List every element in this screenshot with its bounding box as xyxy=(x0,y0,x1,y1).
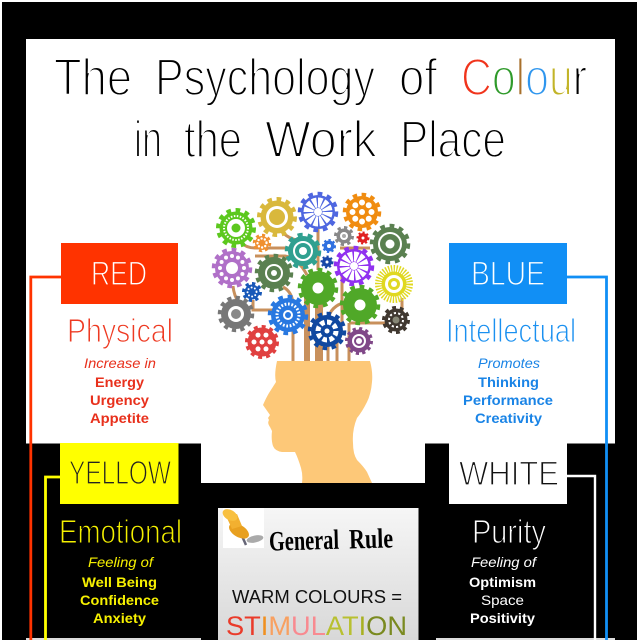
yellow label box xyxy=(60,443,178,504)
gear: olive xyxy=(256,256,292,290)
white list: Space xyxy=(481,592,524,608)
gear: dark green right xyxy=(372,226,408,262)
red label box xyxy=(61,243,178,304)
blue heading: Intellectual xyxy=(446,312,576,349)
red label box: RED xyxy=(91,255,147,293)
white list: Feeling of xyxy=(471,554,538,570)
title: in xyxy=(134,111,162,169)
gear: dark brown xyxy=(384,308,408,332)
white list xyxy=(469,554,538,626)
red list: Increase in xyxy=(84,355,156,371)
blue label box xyxy=(449,243,567,304)
gear: blue spoked xyxy=(300,194,336,230)
panel: red xyxy=(61,243,178,426)
title xyxy=(54,49,587,169)
blue list: Thinking xyxy=(478,374,539,390)
gear: small grey xyxy=(336,228,352,244)
gear: blue ring xyxy=(270,296,306,334)
gear: small orange xyxy=(254,235,270,251)
icon: head silhouette xyxy=(263,361,372,483)
title: Place xyxy=(400,111,506,169)
gear: red xyxy=(246,326,278,358)
connector: yellow line xyxy=(46,477,60,640)
yellow list: Well Being xyxy=(82,574,157,590)
gear: small dark blue xyxy=(322,256,332,268)
white label box: WHITE xyxy=(459,455,559,493)
gear: small blue dotted xyxy=(244,284,260,300)
panel: white xyxy=(449,443,567,626)
white list: Optimism xyxy=(469,574,536,590)
gear: green centre xyxy=(300,270,336,306)
title: Work xyxy=(265,111,378,169)
gear: yellow sun xyxy=(378,268,410,300)
gear: teal xyxy=(286,234,320,268)
blue list: Performance xyxy=(463,392,553,408)
title: the xyxy=(184,111,242,169)
gear: green right xyxy=(342,286,378,324)
gear: plum xyxy=(346,328,372,354)
icon: gear cluster xyxy=(214,194,410,358)
warm colours text: WARM COLOURS = xyxy=(232,587,402,607)
gear: navy xyxy=(310,314,344,348)
general rule heading: General xyxy=(269,525,340,558)
gear: small blue xyxy=(323,240,335,252)
blue label box: BLUE xyxy=(471,255,545,293)
gear: violet spoked xyxy=(336,248,372,284)
panel: white main background xyxy=(26,39,615,483)
connector: white line xyxy=(567,476,595,640)
title: Psychology xyxy=(155,49,375,107)
panel: general rule xyxy=(218,507,418,640)
icon: push pin xyxy=(221,507,264,548)
white heading: Purity xyxy=(472,513,546,550)
red list xyxy=(84,355,156,426)
gear: orange xyxy=(344,194,380,230)
blue list xyxy=(463,355,553,426)
title: Colour xyxy=(461,49,587,107)
panel: blue xyxy=(446,243,576,426)
tree branches xyxy=(232,224,402,361)
red list: Appetite xyxy=(90,410,149,426)
yellow heading: Emotional xyxy=(59,513,182,550)
general rule heading: Rule xyxy=(349,523,393,555)
red list: Urgency xyxy=(90,392,149,408)
gear: gold xyxy=(259,199,295,235)
yellow list xyxy=(80,554,159,626)
title: of xyxy=(399,49,437,107)
yellow list: Anxiety xyxy=(93,610,146,626)
connector: red line xyxy=(31,277,61,640)
blue list: Promotes xyxy=(478,355,540,371)
yellow label box: YELLOW xyxy=(69,454,172,491)
red heading: Physical xyxy=(67,312,173,349)
title: The xyxy=(54,49,132,107)
yellow list: Feeling of xyxy=(88,554,155,570)
yellow list: Confidence xyxy=(80,592,159,608)
connector: blue line xyxy=(567,277,606,640)
red list: Energy xyxy=(95,374,144,390)
gear: mauve xyxy=(214,250,250,286)
gear: grey xyxy=(220,298,252,330)
blue list: Creativity xyxy=(475,410,542,426)
gear: bright green xyxy=(218,210,254,246)
white list: Positivity xyxy=(470,610,535,626)
gear: small red xyxy=(358,232,368,244)
panel: yellow xyxy=(59,443,182,626)
white label box xyxy=(449,443,567,504)
